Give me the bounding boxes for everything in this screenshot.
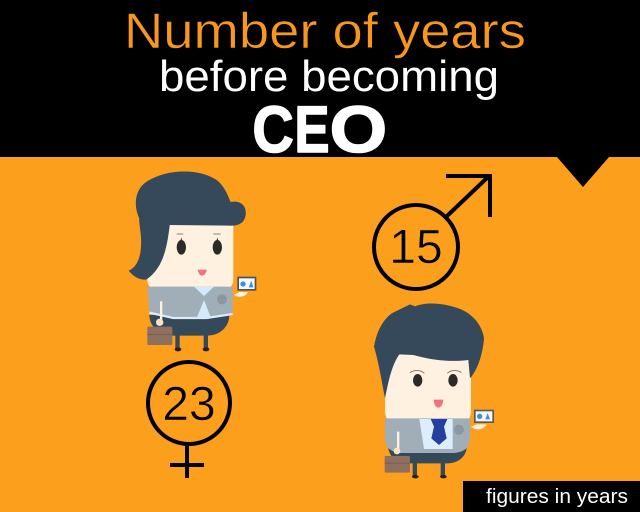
mouth: [198, 270, 207, 276]
footer note text: figures in years: [486, 486, 628, 508]
footer note box: [463, 481, 640, 512]
jacket: [385, 418, 470, 453]
arm and briefcase: [385, 432, 410, 473]
face: [385, 332, 471, 425]
pocket: [217, 294, 227, 304]
title line 3: CEO: E: [294, 92, 330, 166]
face: [147, 200, 233, 290]
male symbol with 15: [374, 176, 490, 289]
tablet and hand: [234, 277, 256, 297]
mouth: [434, 400, 443, 408]
title line 2: before becoming: [159, 52, 499, 101]
pocket: [454, 425, 464, 435]
icon: businesswoman: [129, 171, 256, 351]
title line 1: Number of years: [124, 3, 526, 59]
legs: [175, 332, 209, 351]
title line 3: CEO: O: [330, 93, 387, 166]
hair: [129, 171, 246, 280]
hair: [374, 303, 484, 398]
icon: businessman: [374, 303, 494, 478]
tablet and hand: [471, 410, 494, 429]
male value: 15: [389, 221, 443, 274]
arm and briefcase: [147, 301, 172, 345]
title line 3: CEO: C: [252, 93, 294, 167]
pants: [388, 448, 467, 463]
legs: [412, 460, 447, 478]
shirt: [419, 419, 453, 449]
eyes: [177, 234, 222, 255]
jacket: [147, 287, 233, 318]
female symbol with 23: [148, 362, 230, 478]
eyes and brows: [410, 370, 461, 387]
tie: [431, 419, 447, 445]
title line 3: CEO: [252, 92, 387, 167]
blouse: [194, 287, 214, 318]
pants: [149, 315, 229, 336]
header banner: [0, 0, 640, 187]
female value: 23: [162, 378, 216, 431]
